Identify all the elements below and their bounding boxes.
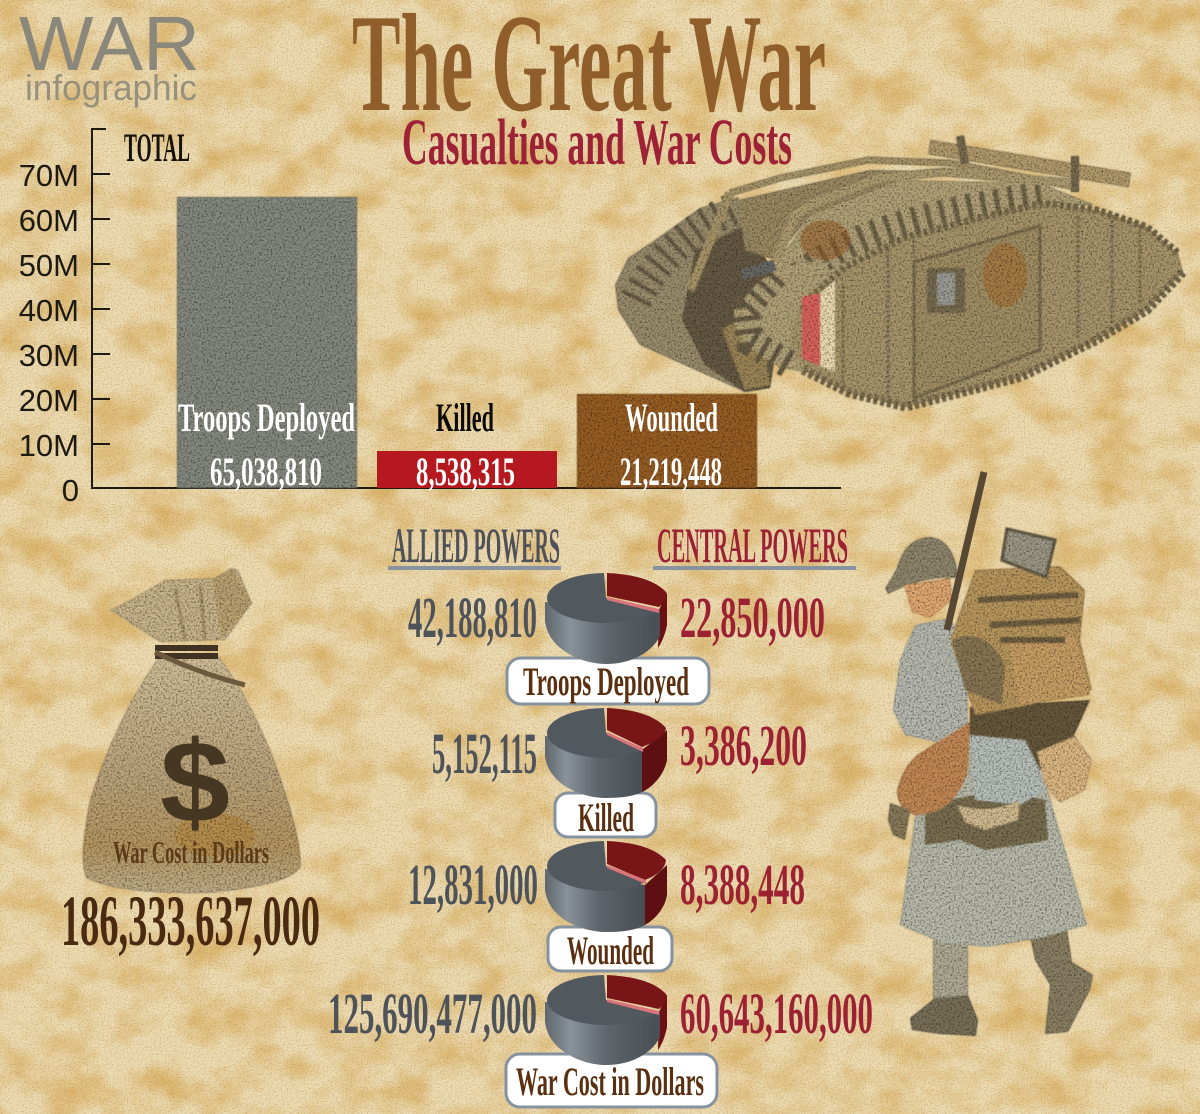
front boot: [910, 995, 978, 1036]
pack: [950, 566, 1092, 715]
deck tread: [772, 180, 1095, 307]
axis labels: 30M: [19, 338, 79, 373]
label: Killed: [578, 795, 634, 840]
bar: troops deployed: Troops Deployed: [178, 395, 355, 440]
central value: 8,388,448: [680, 852, 805, 917]
label: [555, 793, 656, 840]
axis labels: 10M: [19, 428, 79, 463]
central value: 3,386,200: [680, 713, 807, 778]
text: ALLIED POWERS: [392, 517, 560, 573]
label: Troops Deployed: [523, 659, 689, 704]
pie: [545, 841, 667, 932]
bar: killed: 8,538,315: [416, 449, 515, 494]
pouch: [957, 800, 1020, 830]
coat: [900, 736, 1087, 947]
far track: [615, 197, 750, 392]
row: troops deployed: [408, 573, 825, 704]
helmet: [885, 537, 958, 594]
rope: [155, 648, 218, 656]
canteen: [1037, 736, 1092, 803]
row: killed: 5,152,115: [432, 721, 537, 786]
axis labels: 0: [62, 473, 79, 508]
sponson window: [927, 268, 965, 313]
hull panels: [843, 215, 1140, 405]
bag body: [83, 656, 301, 893]
bar: wounded: 21,219,448: [620, 449, 722, 494]
logo: infographic: [25, 67, 197, 108]
unditching beam: [929, 147, 1130, 180]
side cannon: [742, 265, 775, 275]
hull side: [784, 203, 1183, 407]
bar: killed: Killed: [436, 395, 494, 440]
bag caption: War Cost in Dollars: [113, 834, 269, 870]
pie: [545, 975, 667, 1065]
rifle: [947, 472, 984, 630]
mug: [1002, 529, 1055, 577]
axis labels: 60M: [19, 203, 79, 238]
row: war cost in dollars: [328, 975, 873, 1107]
pie: [545, 573, 667, 664]
heading: central powers: [653, 517, 856, 573]
bar: wounded: [577, 394, 757, 494]
rear leg and boot: [1030, 930, 1093, 1034]
bar: killed: [377, 395, 557, 494]
pie: [545, 708, 667, 798]
rails: [730, 160, 1075, 193]
bag ruffle: [110, 568, 252, 642]
bar chart: total: TOTAL: [124, 125, 190, 170]
chart axes: [92, 129, 841, 488]
subtitle: Casualties and War Costs: [402, 106, 792, 179]
row: wounded: 12,831,000: [408, 852, 538, 917]
axis labels: 50M: [19, 248, 79, 283]
total war cost: 186,333,637,000: [61, 881, 320, 961]
label: [548, 927, 672, 973]
dollar sign: $: [160, 717, 230, 847]
axis labels: [19, 158, 79, 508]
hand: [888, 803, 910, 840]
label: [507, 658, 709, 704]
logo: WAR: [19, 1, 200, 87]
label: War Cost in Dollars: [516, 1059, 704, 1104]
label: [506, 1054, 717, 1107]
central value: 22,850,000: [680, 585, 825, 650]
front leg: [933, 940, 968, 1002]
face: [904, 578, 952, 618]
satchel: [897, 722, 970, 815]
text: CENTRAL POWERS: [657, 517, 848, 573]
bar: troops deployed: [177, 197, 357, 494]
heading: allied powers: [388, 517, 561, 573]
axis labels: 70M: [19, 158, 79, 193]
row: killed: [432, 708, 807, 840]
near track: [734, 262, 830, 372]
torso: [893, 618, 968, 745]
illustration: money bag: [83, 568, 301, 893]
axis labels: 20M: [19, 383, 79, 418]
label: Wounded: [567, 928, 654, 973]
bar: wounded: Wounded: [625, 395, 718, 440]
row: wounded: [408, 841, 805, 973]
red stripe: [802, 293, 820, 366]
underside shadow: [682, 225, 785, 392]
illustration: soldier: [885, 472, 1093, 1036]
bar chart: total: [19, 125, 841, 508]
bar: troops deployed: 65,038,810: [210, 449, 322, 494]
allied value: 125,690,477,000: [328, 981, 537, 1046]
hull rivets band: [799, 203, 1178, 307]
axis labels: 40M: [19, 293, 79, 328]
illustration: tank: [615, 136, 1183, 407]
belt shadow: [970, 700, 1090, 770]
upper deck far side: [738, 170, 1000, 260]
central value: 60,643,160,000: [680, 981, 873, 1046]
row: troops deployed: 42,188,810: [408, 585, 537, 650]
rust patch: [983, 243, 1027, 307]
